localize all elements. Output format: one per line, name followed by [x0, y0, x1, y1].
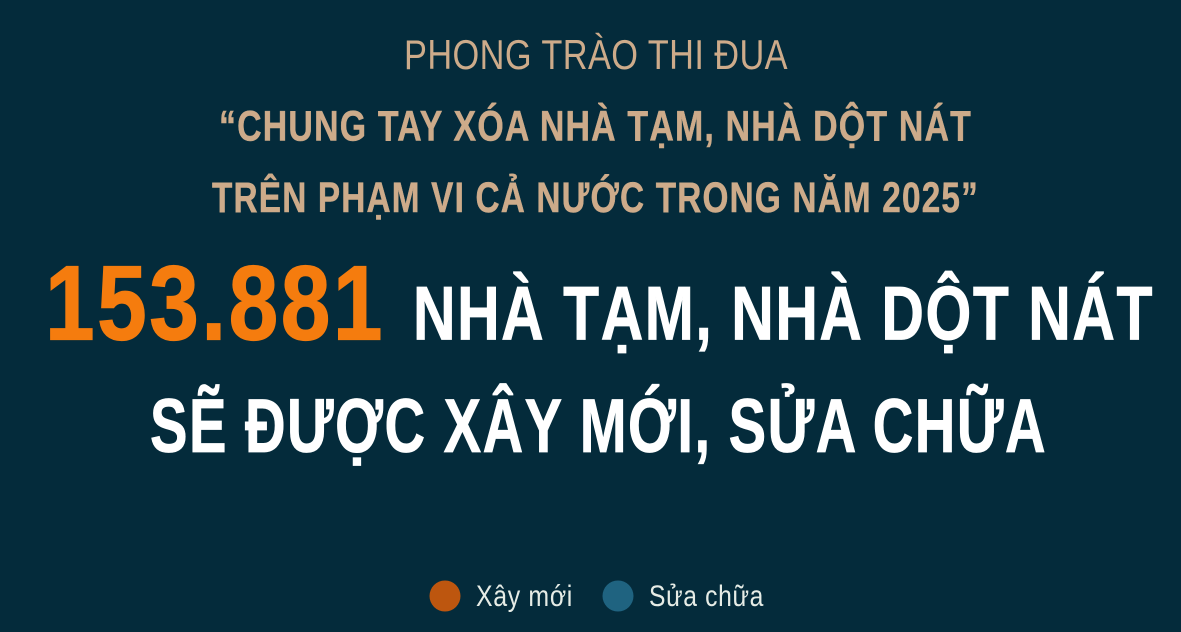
headline: key figure	[45, 244, 1154, 469]
title: campaign name	[212, 31, 979, 222]
title: campaign name: PHONG TRÀO THI ĐUA	[404, 31, 788, 78]
legend item: new construction	[430, 580, 573, 613]
legend item: repair	[602, 580, 764, 613]
legend	[430, 580, 764, 613]
legend item: new construction: Xây mới	[476, 580, 573, 613]
headline: key figure: 153.881	[45, 244, 385, 362]
title: campaign name: TRÊN PHẠM VI CẢ NƯỚC TRONG NĂM 2025”	[212, 173, 979, 222]
legend item: repair: Sửa chữa	[649, 580, 764, 613]
title: campaign name: “CHUNG TAY XÓA NHÀ TẠM, NHÀ DỘT NÁT	[219, 102, 972, 150]
